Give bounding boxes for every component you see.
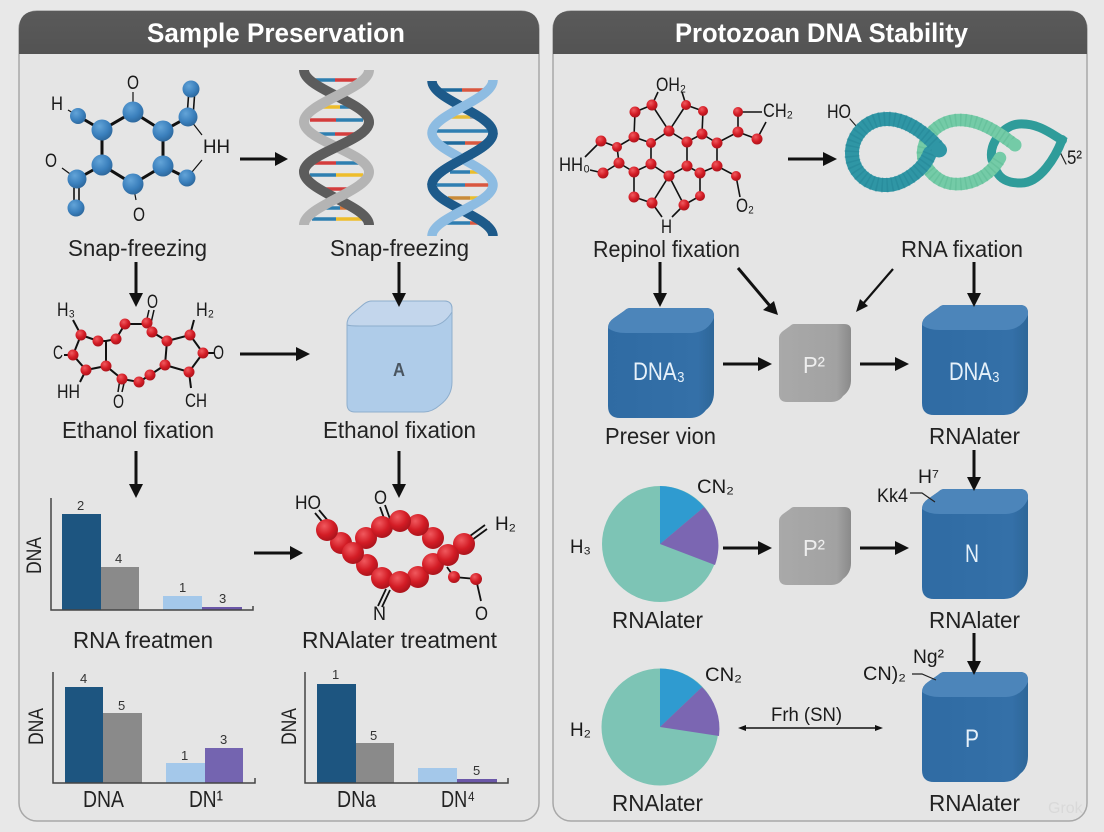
icon: grey DNA helix [304,70,369,225]
bar chart: RNA treatment [23,498,253,610]
molecule: red bead ring: HO [295,493,321,514]
bar chart: DNA and DN1: 3 [220,732,227,747]
molecule: red bead ring [295,488,516,625]
label: 5 squared: 5² [1067,148,1082,169]
pie chart: lower [570,665,742,786]
molecule: red ring: H₂ [196,300,214,321]
callout: CN)2 and Ng2 [863,647,944,685]
bar chart: RNA treatment: 4 [115,551,122,566]
icon: light blue container [347,301,452,412]
x label: DN1: DN¹ [189,786,223,812]
box: DNA3 right [922,305,1028,415]
axis label: DNA: DNA [23,537,46,574]
double arrow: Frh (SN) [738,705,883,731]
box: N: N [965,540,979,568]
arrow: molecule to DNA [240,152,288,166]
arrow: right [723,541,772,555]
arrow: right [723,357,772,371]
molecule: red lattice: OH₂ [656,75,686,96]
bar chart: DNA and DN1: 4 [80,671,87,686]
molecule: red ring: H₃ [57,300,75,321]
bar chart: DNa and DN4: 1 [332,667,339,682]
box: P [922,672,1028,782]
bar chart: RNA treatment: 1 [179,580,186,595]
arrow: down [392,451,406,498]
bar chart: RNA treatment: 2 [77,498,84,513]
watermark: Grok [1048,800,1084,817]
box: DNA3 right: DNA₃ [949,358,1000,386]
heading: Protozoan DNA Stability: Protozoan DNA Stability [675,18,968,48]
molecule: red lattice: HH₀ [559,155,590,176]
callout: Kk4 and H7: H⁷ [918,467,939,488]
molecule: blue ring: O [133,205,145,226]
label: RNAlater: RNAlater [929,423,1020,449]
molecule: red ring: CH [185,391,207,412]
double arrow: Frh (SN): Frh (SN) [771,705,842,726]
arrow: down [967,633,981,675]
molecule: red bead ring: N [373,604,386,625]
x label: DNA: DNA [83,786,125,812]
molecule: red lattice: CH₂ [763,101,793,122]
arrow: right [860,357,909,371]
molecule: red bead ring: H₂ [495,514,516,535]
bar chart: DNA and DN1: 1 [181,748,188,763]
pie chart: lower: H₂ [570,720,591,741]
bar chart: DNa and DN4 [278,667,508,812]
arrow: down [129,262,143,307]
icon: looped RNA strand [827,102,1082,185]
heading: Sample Preservation: Sample Preservation [147,18,405,48]
molecule: blue ring: HH [203,137,230,158]
arrow: right [788,152,837,166]
bar chart: DNa and DN4: 5 [370,728,377,743]
molecule: blue ring [45,73,230,226]
box: P2 upper [779,324,851,402]
label: RNAlater: RNAlater [612,607,703,633]
box: P2 upper: P² [803,352,825,378]
box: DNA3 left [608,308,714,418]
label: Snap-freezing: Snap-freezing [68,235,207,261]
arrow: down [967,262,981,307]
label: Snap-freezing: Snap-freezing [330,235,469,261]
molecule: red ring: O [147,292,158,313]
pie chart: upper: CN₂ [697,477,734,498]
label: RNAlater treatment: RNAlater treatment [302,627,498,653]
arrow: down [392,262,406,307]
pie chart: upper [570,477,734,602]
molecule: red bead ring: O [374,488,387,509]
molecule: red ring: HH [57,382,80,403]
pie chart: lower: CN₂ [705,665,742,686]
bar chart: DNA and DN1: 5 [118,698,125,713]
arrow: diagonal to P box [856,269,893,312]
label: RNA freatmen: RNA freatmen [73,627,213,653]
molecule: red lattice: H [661,217,672,238]
box: P2 lower: P² [803,535,825,561]
label: RNAlater: RNAlater [929,790,1020,816]
label: RNAlater: RNAlater [612,790,703,816]
molecule: red ring: O [213,343,224,364]
molecule: red bead ring: O [475,604,488,625]
box: P2 lower [779,507,851,585]
box: P: P [965,725,979,753]
panel: Protozoan DNA Stability [553,11,1087,821]
bar chart: DNa and DN4: 5 [473,763,480,778]
molecule: blue ring: O [127,73,139,94]
axis label: DNA: DNA [278,708,301,745]
callout: CN)2 and Ng2: Ng² [913,647,944,668]
panel: Sample Preservation [19,11,539,821]
callout: Kk4 and H7 [877,467,939,507]
box: DNA3 left: DNA₃ [633,358,685,386]
molecule: red ring: C [53,343,63,364]
label: Preservion: Preser vion [605,423,716,449]
left panel header bar [19,11,539,54]
right panel header bar [553,11,1087,54]
label: A: A [393,360,405,380]
arrow: right [240,347,310,361]
label: Ethanol fixation: Ethanol fixation [62,417,214,443]
molecule: red lattice [559,75,793,238]
molecule: blue ring: H [51,94,63,115]
arrow: down [129,451,143,498]
label: Ethanol fixation: Ethanol fixation [323,417,476,443]
x label: DN4: DN⁴ [441,786,475,812]
bar chart: DNA and DN1 [25,671,255,812]
x label: DNa: DNa [337,786,376,812]
callout: Kk4 and H7: Kk4 [877,486,908,507]
molecule: blue ring: O [45,151,57,172]
pie chart: upper: H₃ [570,537,591,558]
box: N [922,489,1028,599]
arrow: right [860,541,909,555]
arrow: down [967,450,981,491]
molecule: red ring: O [113,392,124,413]
bar chart: RNA treatment: 3 [219,591,226,606]
icon: blue DNA helix [432,80,493,236]
axis label: DNA: DNA [25,708,48,745]
label: RNA fixation: RNA fixation [901,236,1023,262]
label: HO: HO [827,102,851,123]
arrow: down [653,262,667,307]
label: Repinol fixation: Repinol fixation [593,236,740,262]
molecule: red ring [53,292,224,413]
label: RNAlater: RNAlater [929,607,1020,633]
molecule: red lattice: O₂ [736,196,754,217]
arrow: right [254,546,303,560]
callout: CN)2 and Ng2: CN)₂ [863,664,906,685]
arrow: diagonal to P box [738,268,778,315]
